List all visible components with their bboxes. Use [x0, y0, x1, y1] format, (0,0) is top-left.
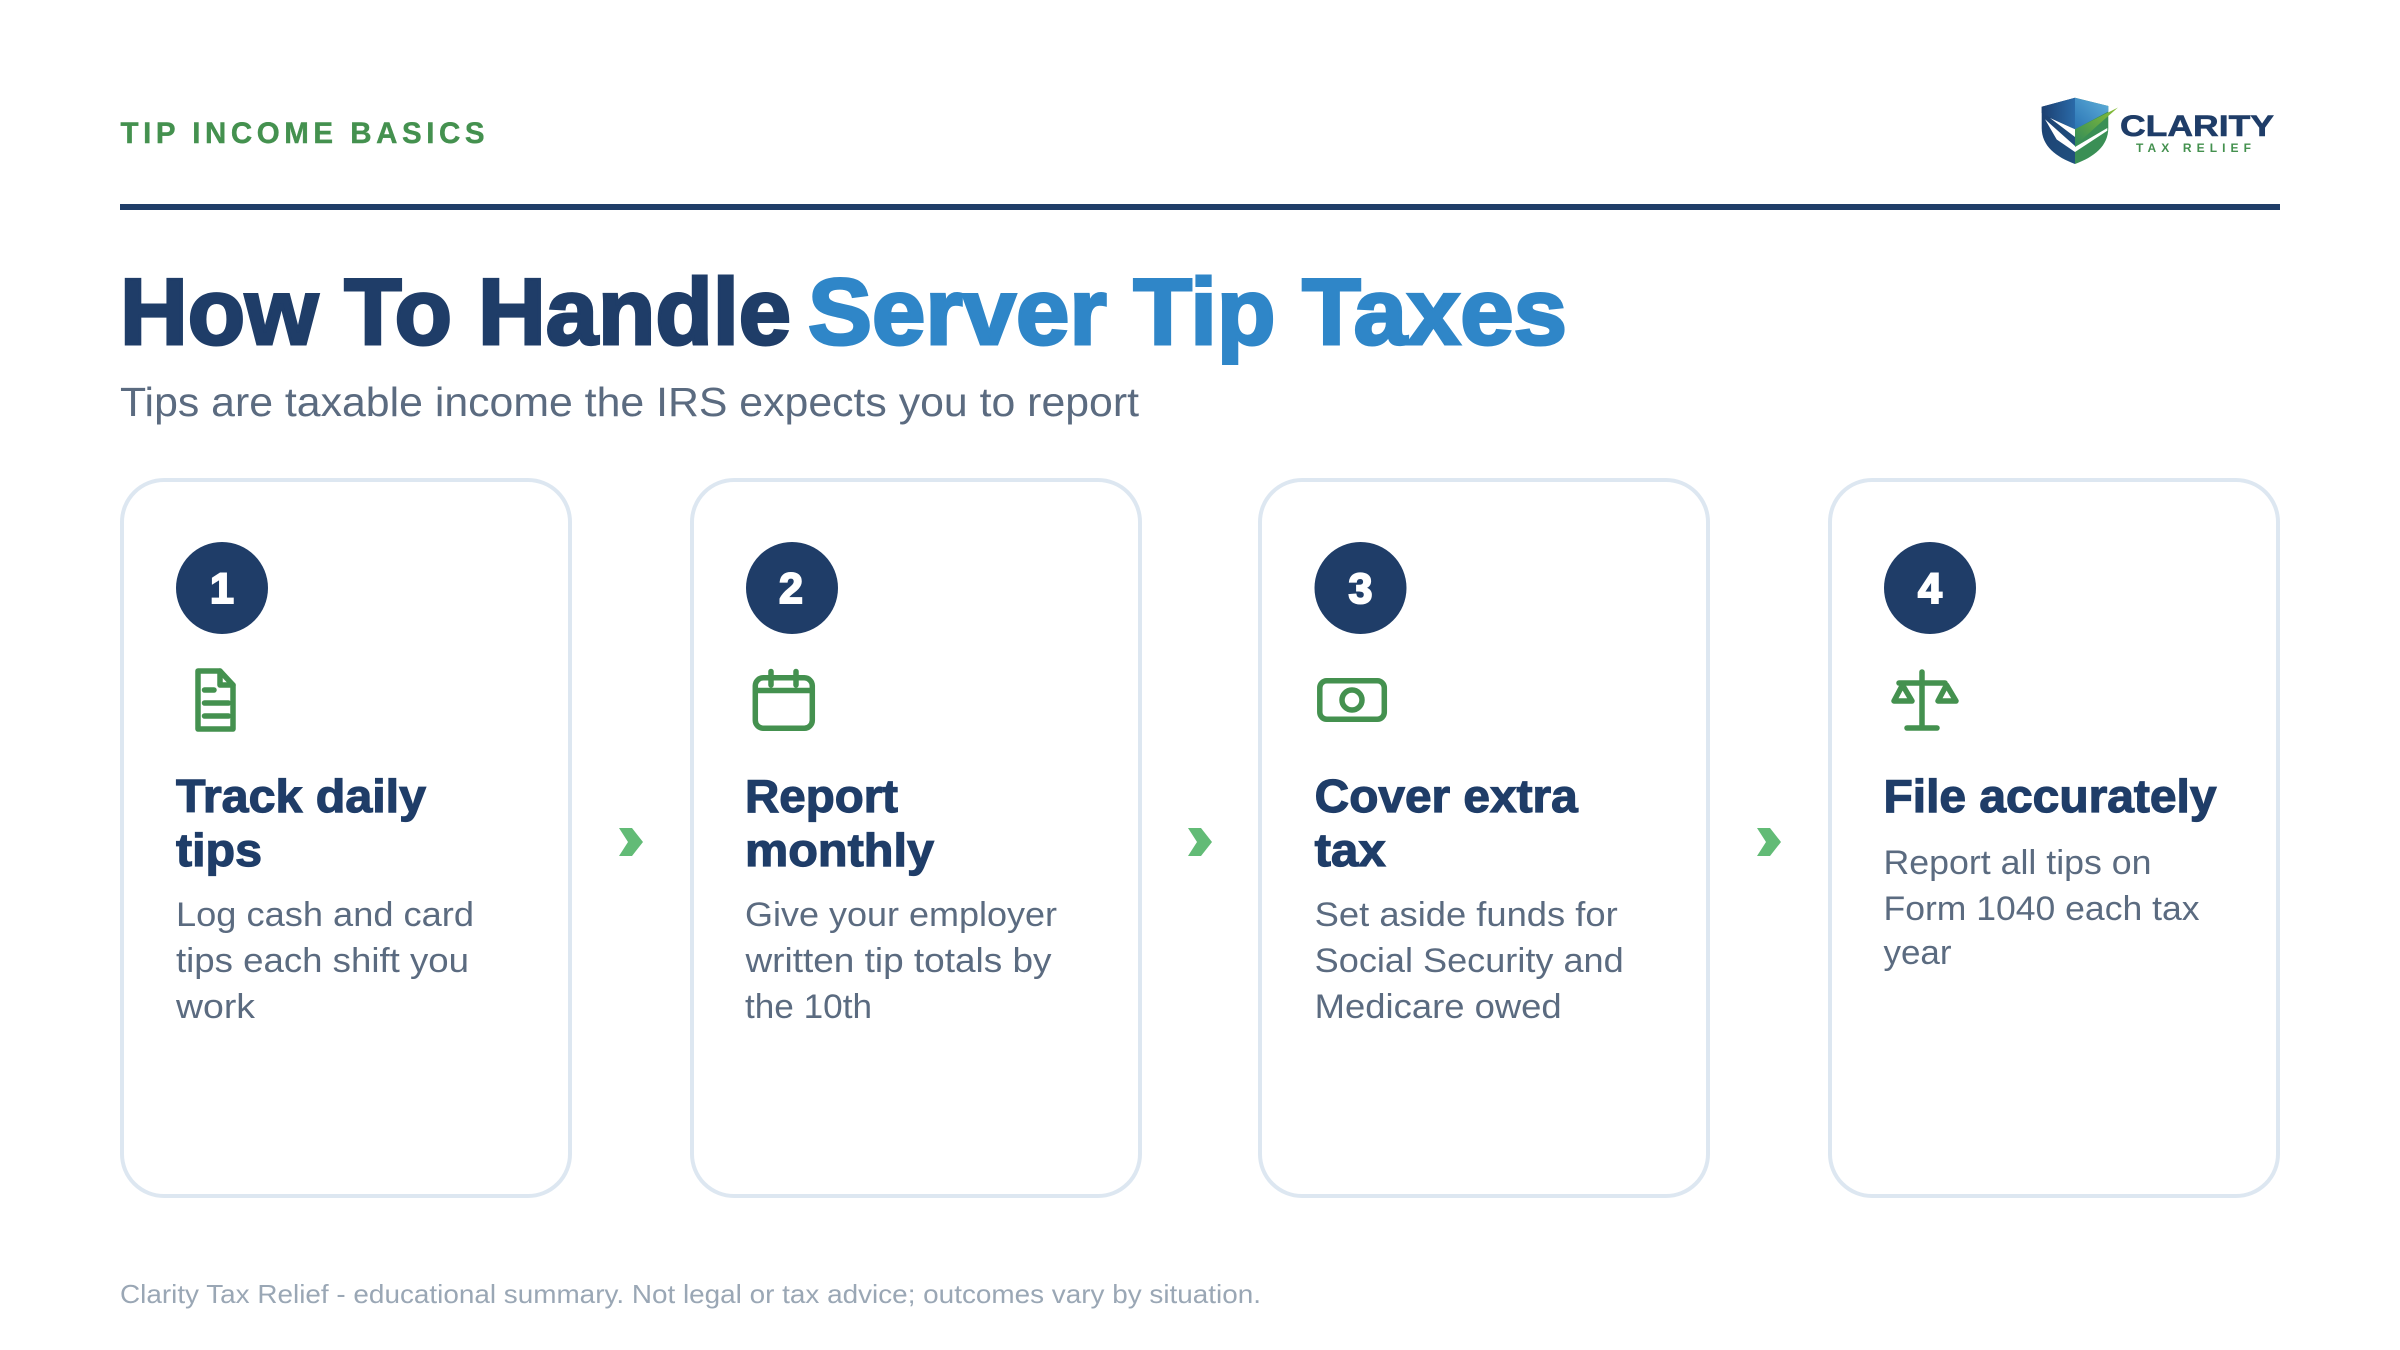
panel: step 4 file accurately [1830, 480, 2278, 1196]
header rule [120, 204, 2280, 210]
title: Server Tip Taxes [808, 259, 1567, 364]
logo: Clarity Tax Relief [2042, 98, 2274, 164]
step number 4: 4 [1918, 565, 1942, 613]
body text: the 10th [745, 988, 872, 1026]
icon: banknote [1320, 681, 1384, 719]
icon: calendar [755, 672, 812, 728]
arrow 1 [619, 828, 643, 856]
icon: balance scales [1894, 672, 1956, 728]
body text [175, 896, 474, 1026]
arrow 2 [1188, 828, 1212, 856]
eyebrow label: TIP INCOME BASICS [120, 117, 484, 150]
body text [744, 896, 1057, 1026]
body text: Medicare owed [1315, 988, 1562, 1026]
heading: tips [176, 824, 262, 876]
step number 2 [746, 542, 838, 634]
panel: step 2 report monthly [692, 480, 1140, 1196]
heading: File accurately [1884, 770, 2217, 822]
step number 3 [1314, 542, 1406, 634]
subtitle: Tips are taxable income the IRS expects you to report [120, 379, 1139, 425]
body text: year [1884, 934, 1952, 972]
heading: Report [745, 770, 898, 822]
panel: step 1 track daily tips [122, 480, 570, 1196]
body text: tips each shift you [176, 942, 469, 980]
heading [1315, 770, 1578, 876]
body text: Form 1040 each tax [1884, 890, 2200, 928]
body text [1884, 844, 2200, 972]
step number 3: 3 [1349, 565, 1372, 613]
body text: Social Security and [1315, 942, 1624, 980]
heading: Track daily [176, 770, 426, 822]
step number 2: 2 [779, 565, 803, 613]
body text: written tip totals by [744, 942, 1052, 980]
body text: work [175, 988, 256, 1026]
step number 4 [1884, 542, 1976, 634]
body text: Set aside funds for [1315, 896, 1618, 934]
body text: Log cash and card [176, 896, 474, 934]
arrow 3 [1757, 828, 1781, 856]
logo tagline: TAX RELIEF [2136, 141, 2251, 155]
body text: Report all tips on [1884, 844, 2152, 882]
body text [1315, 896, 1624, 1026]
title [120, 259, 1567, 364]
step number 1 [176, 542, 268, 634]
body text: Give your employer [745, 896, 1057, 934]
logo wordmark: CLARITY [2120, 110, 2274, 143]
title: How To Handle [120, 259, 791, 364]
footer disclaimer: Clarity Tax Relief - educational summary. Not legal or tax advice; outcomes vary by situation. [120, 1279, 1261, 1309]
icon: shield with checkmark [2042, 98, 2118, 164]
heading: tax [1315, 824, 1386, 876]
step number 1: 1 [210, 565, 234, 613]
heading: monthly [745, 824, 934, 876]
heading [176, 770, 426, 876]
heading: Cover extra [1315, 770, 1578, 822]
icon: document [198, 671, 233, 729]
panel: step 3 cover extra tax [1260, 480, 1708, 1196]
heading [745, 770, 934, 876]
